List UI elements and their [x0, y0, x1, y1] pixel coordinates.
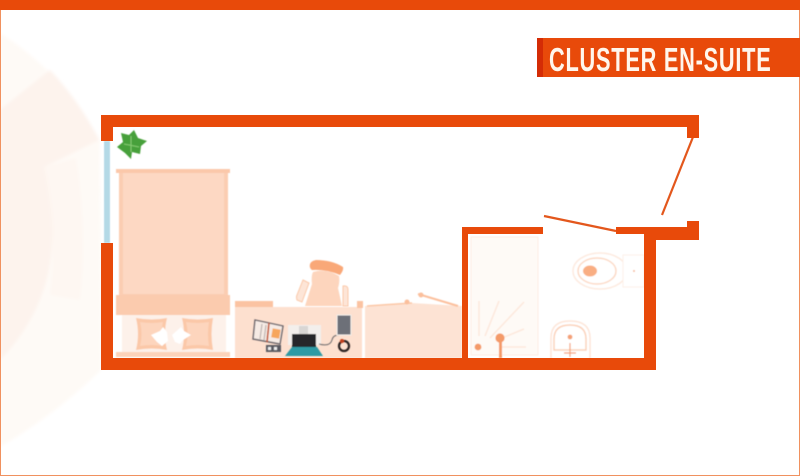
desk	[235, 301, 363, 358]
toilet	[573, 253, 644, 289]
floor plan	[101, 115, 699, 370]
pillows	[136, 318, 167, 350]
door swing lines	[544, 137, 693, 231]
background radial decoration	[0, 33, 101, 447]
plant icon	[117, 130, 147, 159]
sink	[551, 321, 590, 358]
side desk	[365, 292, 462, 358]
walls	[101, 115, 699, 370]
window	[104, 141, 110, 243]
shower	[471, 237, 538, 358]
chair	[296, 260, 348, 306]
bed	[116, 169, 230, 357]
title banner: CLUSTER EN-SUITE	[549, 41, 771, 78]
desk items: folder, laptop, phone, charger	[253, 315, 351, 356]
